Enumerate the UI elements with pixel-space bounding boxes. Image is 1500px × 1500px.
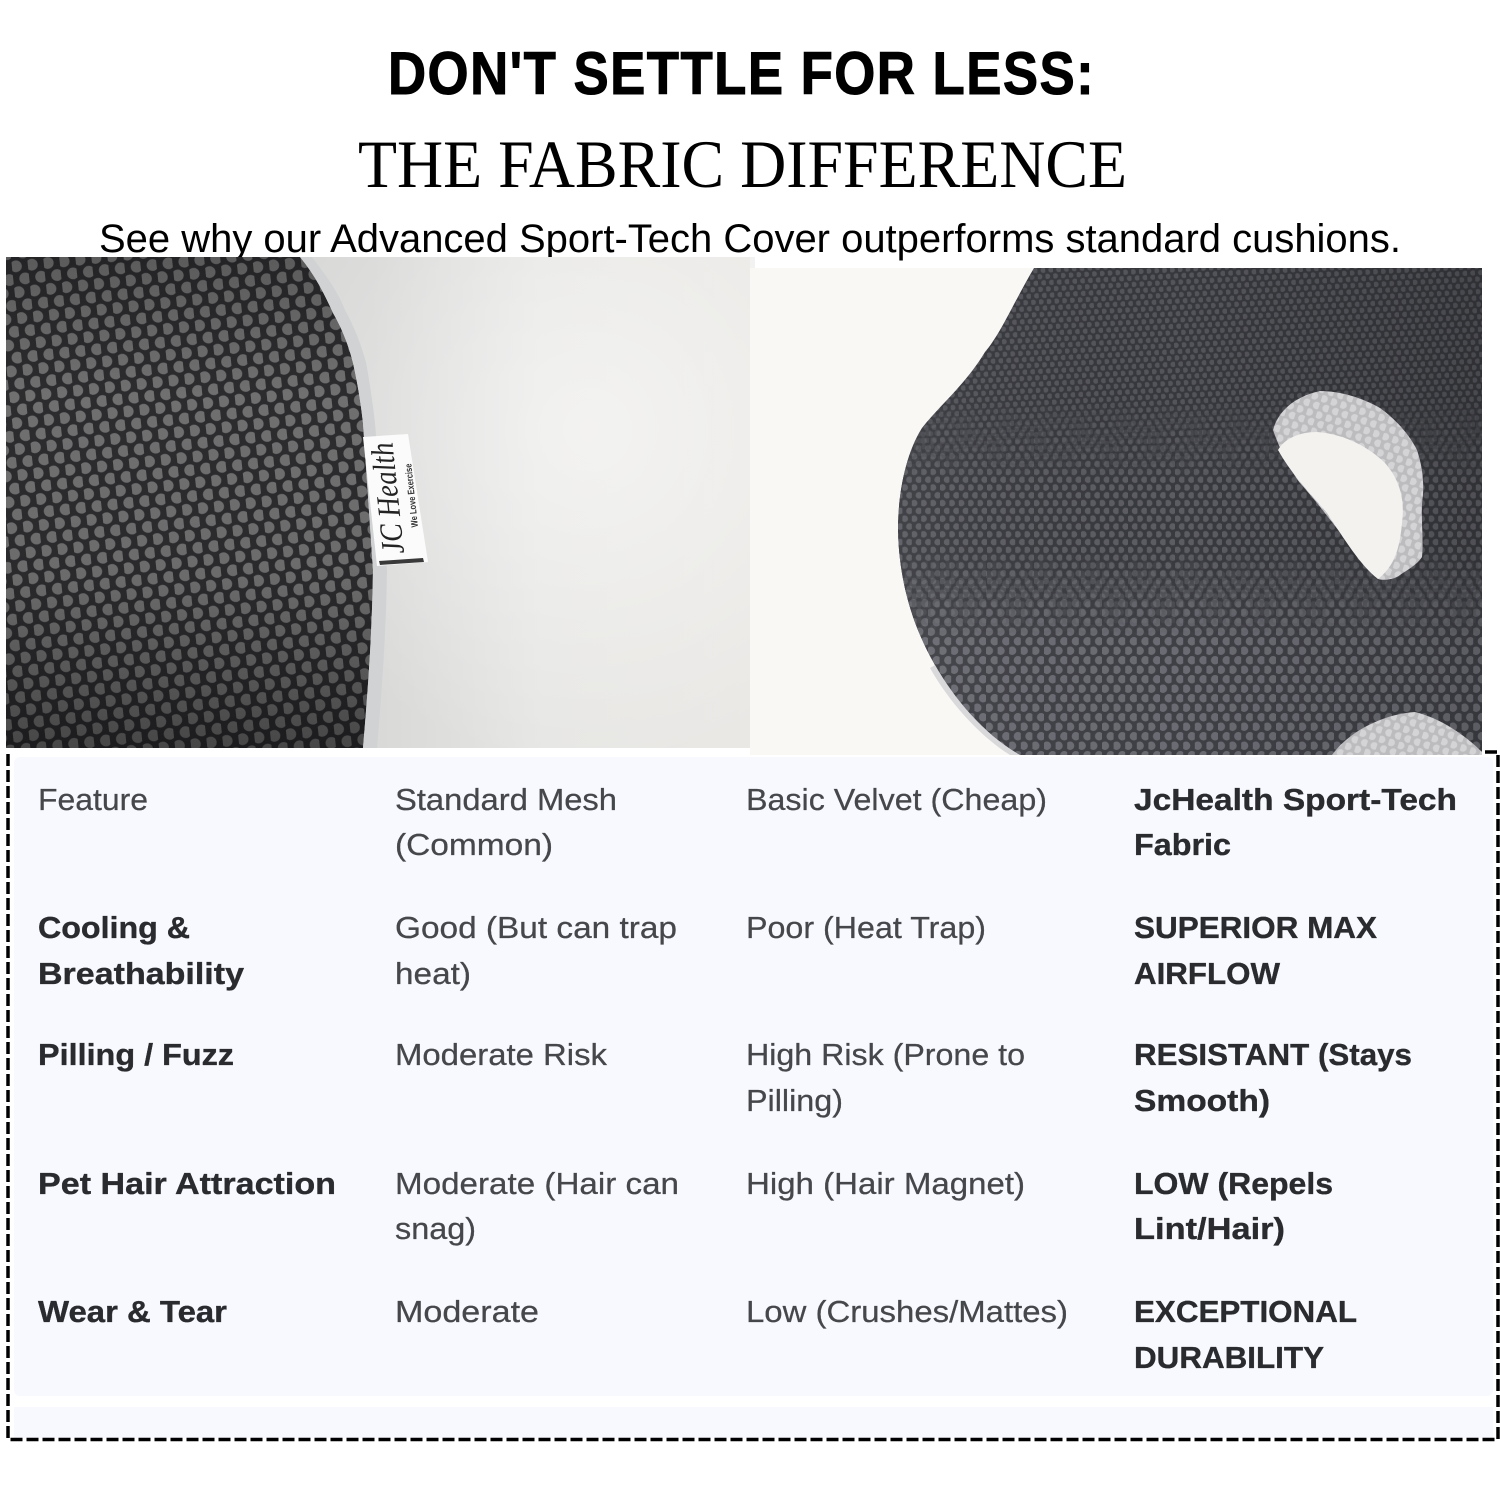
row: cooling and breathability: Poor (Heat Trap) [746, 910, 986, 945]
row: cooling and breathability: Good (But can trap [395, 910, 677, 945]
lower rim of cushion [930, 665, 1020, 755]
header row: Basic Velvet (Cheap) [746, 782, 1047, 817]
comparison table panel [8, 750, 1498, 1440]
row: pet hair attraction: snag) [395, 1211, 476, 1246]
row: cooling and breathability: Cooling & [38, 910, 190, 945]
photo: cushion with cut-out [750, 260, 1490, 760]
subtitle: See why our Advanced Sport-Tech Cover outperforms standard cushions. [99, 217, 1401, 261]
row: pilling and fuzz: High Risk (Prone to [746, 1037, 1025, 1072]
header row: Standard Mesh [395, 782, 617, 817]
row: pilling and fuzz: Smooth) [1134, 1083, 1270, 1118]
row: cooling and breathability: AIRFLOW [1134, 956, 1281, 991]
sewn label [363, 434, 428, 566]
row: pet hair attraction: High (Hair Magnet) [746, 1166, 1025, 1201]
front notch rim [1332, 712, 1482, 755]
row: wear and tear: Wear & Tear [38, 1294, 227, 1329]
cut-out inner band [1273, 391, 1423, 580]
row: pet hair attraction: Moderate (Hair can [395, 1166, 679, 1201]
header row: JcHealth Sport-Tech [1134, 782, 1457, 817]
heading: the fabric difference: THE FABRIC DIFFERENCE [358, 126, 1127, 202]
dashed border [8, 750, 1498, 1440]
row: pilling and fuzz: Moderate Risk [395, 1037, 608, 1072]
header row: Feature [38, 782, 148, 817]
row: cooling and breathability: heat) [395, 956, 471, 991]
cut-out opening [1278, 432, 1403, 579]
row: wear and tear: Low (Crushes/Mattes) [746, 1294, 1068, 1329]
row: pet hair attraction [38, 1166, 1333, 1246]
sewn label: JC Health [363, 441, 411, 556]
row: wear and tear: Moderate [395, 1294, 539, 1329]
row: pet hair attraction: LOW (Repels [1134, 1166, 1333, 1201]
row: pilling and fuzz: RESISTANT (Stays [1134, 1037, 1412, 1072]
header row: Fabric [1134, 827, 1231, 862]
row: cooling and breathability [38, 910, 1377, 991]
photo: fabric close-up with label [6, 257, 755, 748]
header row [38, 782, 1457, 862]
row: cooling and breathability: SUPERIOR MAX [1134, 910, 1377, 945]
row: pilling and fuzz: Pilling / Fuzz [38, 1037, 234, 1072]
row: wear and tear [38, 1294, 1357, 1375]
title: don't settle for less: DON'T SETTLE FOR LESS: [388, 40, 1094, 107]
sewn label: We Love Exercise [403, 463, 421, 528]
row: pet hair attraction: Lint/Hair) [1134, 1211, 1285, 1246]
cushion body [880, 260, 1490, 760]
row: wear and tear: EXCEPTIONAL [1134, 1294, 1357, 1329]
row: cooling and breathability: Breathability [38, 956, 245, 991]
row: pilling and fuzz [38, 1037, 1412, 1118]
header row: (Common) [395, 827, 553, 862]
fabric mesh swatch [6, 257, 376, 748]
piping edge [300, 257, 387, 748]
row: pet hair attraction: Pet Hair Attraction [38, 1166, 336, 1201]
row: wear and tear: DURABILITY [1134, 1340, 1324, 1375]
row: pilling and fuzz: Pilling) [746, 1083, 843, 1118]
